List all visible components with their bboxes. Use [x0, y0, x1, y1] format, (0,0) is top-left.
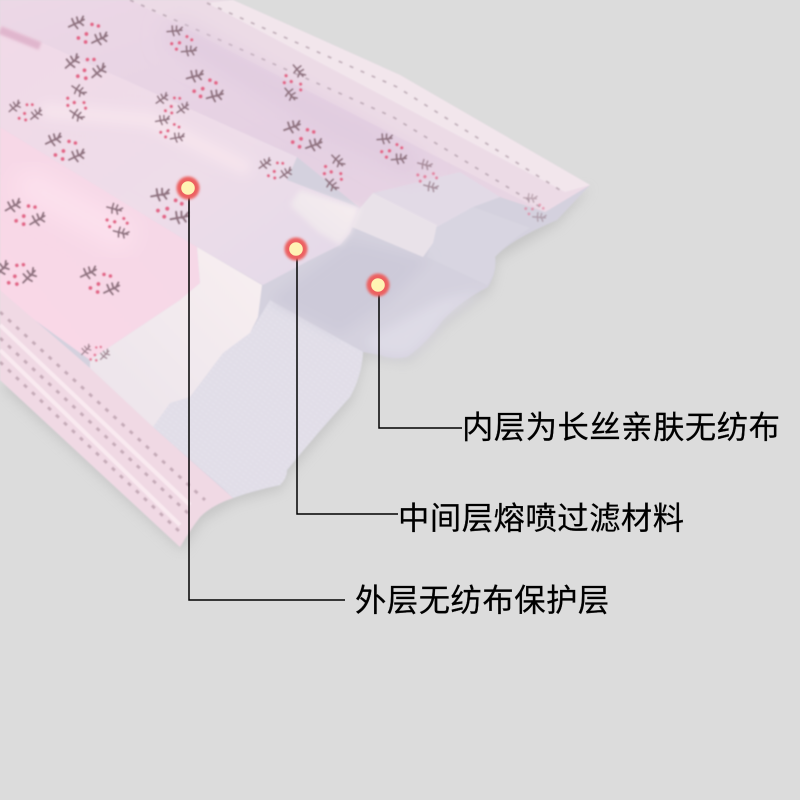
label: outer layer: 外层无纺布保护层	[355, 583, 610, 618]
marker dot: inner layer	[366, 274, 390, 296]
lower stitched band	[0, 290, 233, 547]
top upper fold with flowers	[0, 0, 590, 212]
leader line: inner layer	[379, 288, 462, 428]
third fold: bright pink layer	[0, 127, 200, 360]
second fold: pink flowered layer	[0, 25, 360, 285]
callout: inner layer	[366, 274, 780, 445]
white middle layer right	[352, 193, 437, 257]
marker dot: middle layer	[284, 238, 308, 260]
leader line: outer layer	[189, 190, 345, 600]
fold shading	[0, 30, 420, 240]
flower print	[0, 16, 553, 366]
callout: outer layer	[176, 176, 610, 618]
inner layer: lavender fabric	[0, 0, 590, 547]
pale fabric at right	[373, 172, 500, 227]
marker dot: outer layer	[176, 176, 200, 200]
mask drop shadow	[0, 188, 590, 551]
label: inner layer: 内层为长丝亲肤无纺布	[462, 410, 780, 445]
white middle layer left	[90, 247, 262, 427]
upper stitched band	[130, 0, 590, 212]
leader line: middle layer	[297, 252, 398, 514]
label: middle layer: 中间层熔喷过滤材料	[398, 501, 685, 536]
callout: middle layer	[284, 238, 685, 536]
white middle layer centre	[290, 190, 360, 245]
mask photograph	[0, 0, 590, 551]
